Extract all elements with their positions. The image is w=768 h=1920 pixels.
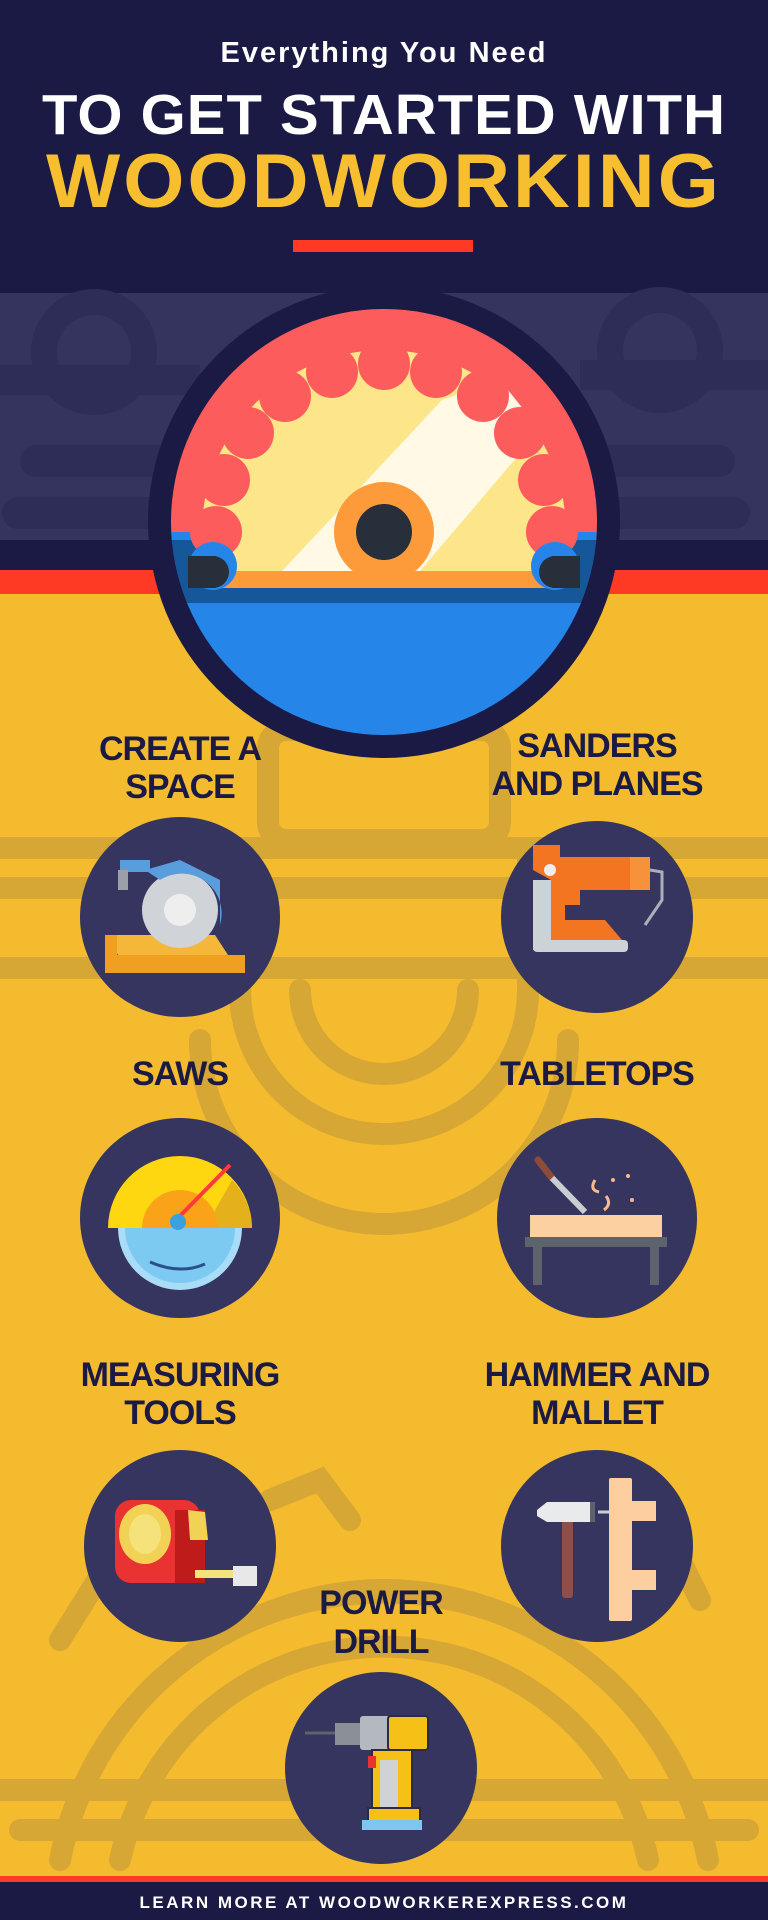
item: measuring tools: TOOLS <box>124 1394 236 1432</box>
item: measuring tools <box>81 1356 279 1642</box>
item: create a space: CREATE A <box>99 730 261 768</box>
footer: LEARN MORE AT WOODWORKEREXPRESS.COM <box>140 1893 628 1912</box>
item: sanders and planes <box>491 727 703 1013</box>
title line 1: TO GET STARTED WITH <box>42 83 726 147</box>
icon: miter saw <box>105 860 245 973</box>
item: hammer and mallet: MALLET <box>531 1394 664 1432</box>
item: tabletops: TABLETOPS <box>500 1055 694 1093</box>
watermark: chair <box>0 730 768 1224</box>
hero: table saw circle <box>148 286 620 758</box>
item: hammer and mallet: HAMMER AND <box>485 1356 710 1394</box>
footer <box>0 1876 768 1920</box>
item: power drill <box>285 1584 477 1864</box>
item: power drill: DRILL <box>333 1623 429 1661</box>
icon: circular saw <box>108 1156 252 1290</box>
icon: hammer <box>537 1478 656 1621</box>
icon: chisel and table <box>525 1160 667 1285</box>
item: sanders and planes: SANDERS <box>517 727 677 765</box>
item: measuring tools: MEASURING <box>81 1356 279 1394</box>
item: tabletops <box>497 1055 697 1318</box>
item: saws <box>80 1055 280 1318</box>
item: saws: SAWS <box>132 1055 228 1093</box>
item: create a space: SPACE <box>125 768 235 806</box>
item: sanders and planes: AND PLANES <box>491 765 703 803</box>
item: power drill: POWER <box>319 1584 443 1622</box>
title line 2: WOODWORKING <box>46 139 722 224</box>
header <box>0 0 768 293</box>
red underline <box>293 240 473 252</box>
icon: sander <box>533 845 662 952</box>
watermark: saw bottom <box>0 1480 768 1860</box>
subtitle: Everything You Need <box>220 37 548 69</box>
banner band <box>0 293 768 594</box>
icon: tape measure <box>115 1500 257 1586</box>
item: hammer and mallet <box>485 1356 710 1642</box>
icon: drill <box>305 1716 428 1830</box>
item: create a space <box>80 730 280 1017</box>
